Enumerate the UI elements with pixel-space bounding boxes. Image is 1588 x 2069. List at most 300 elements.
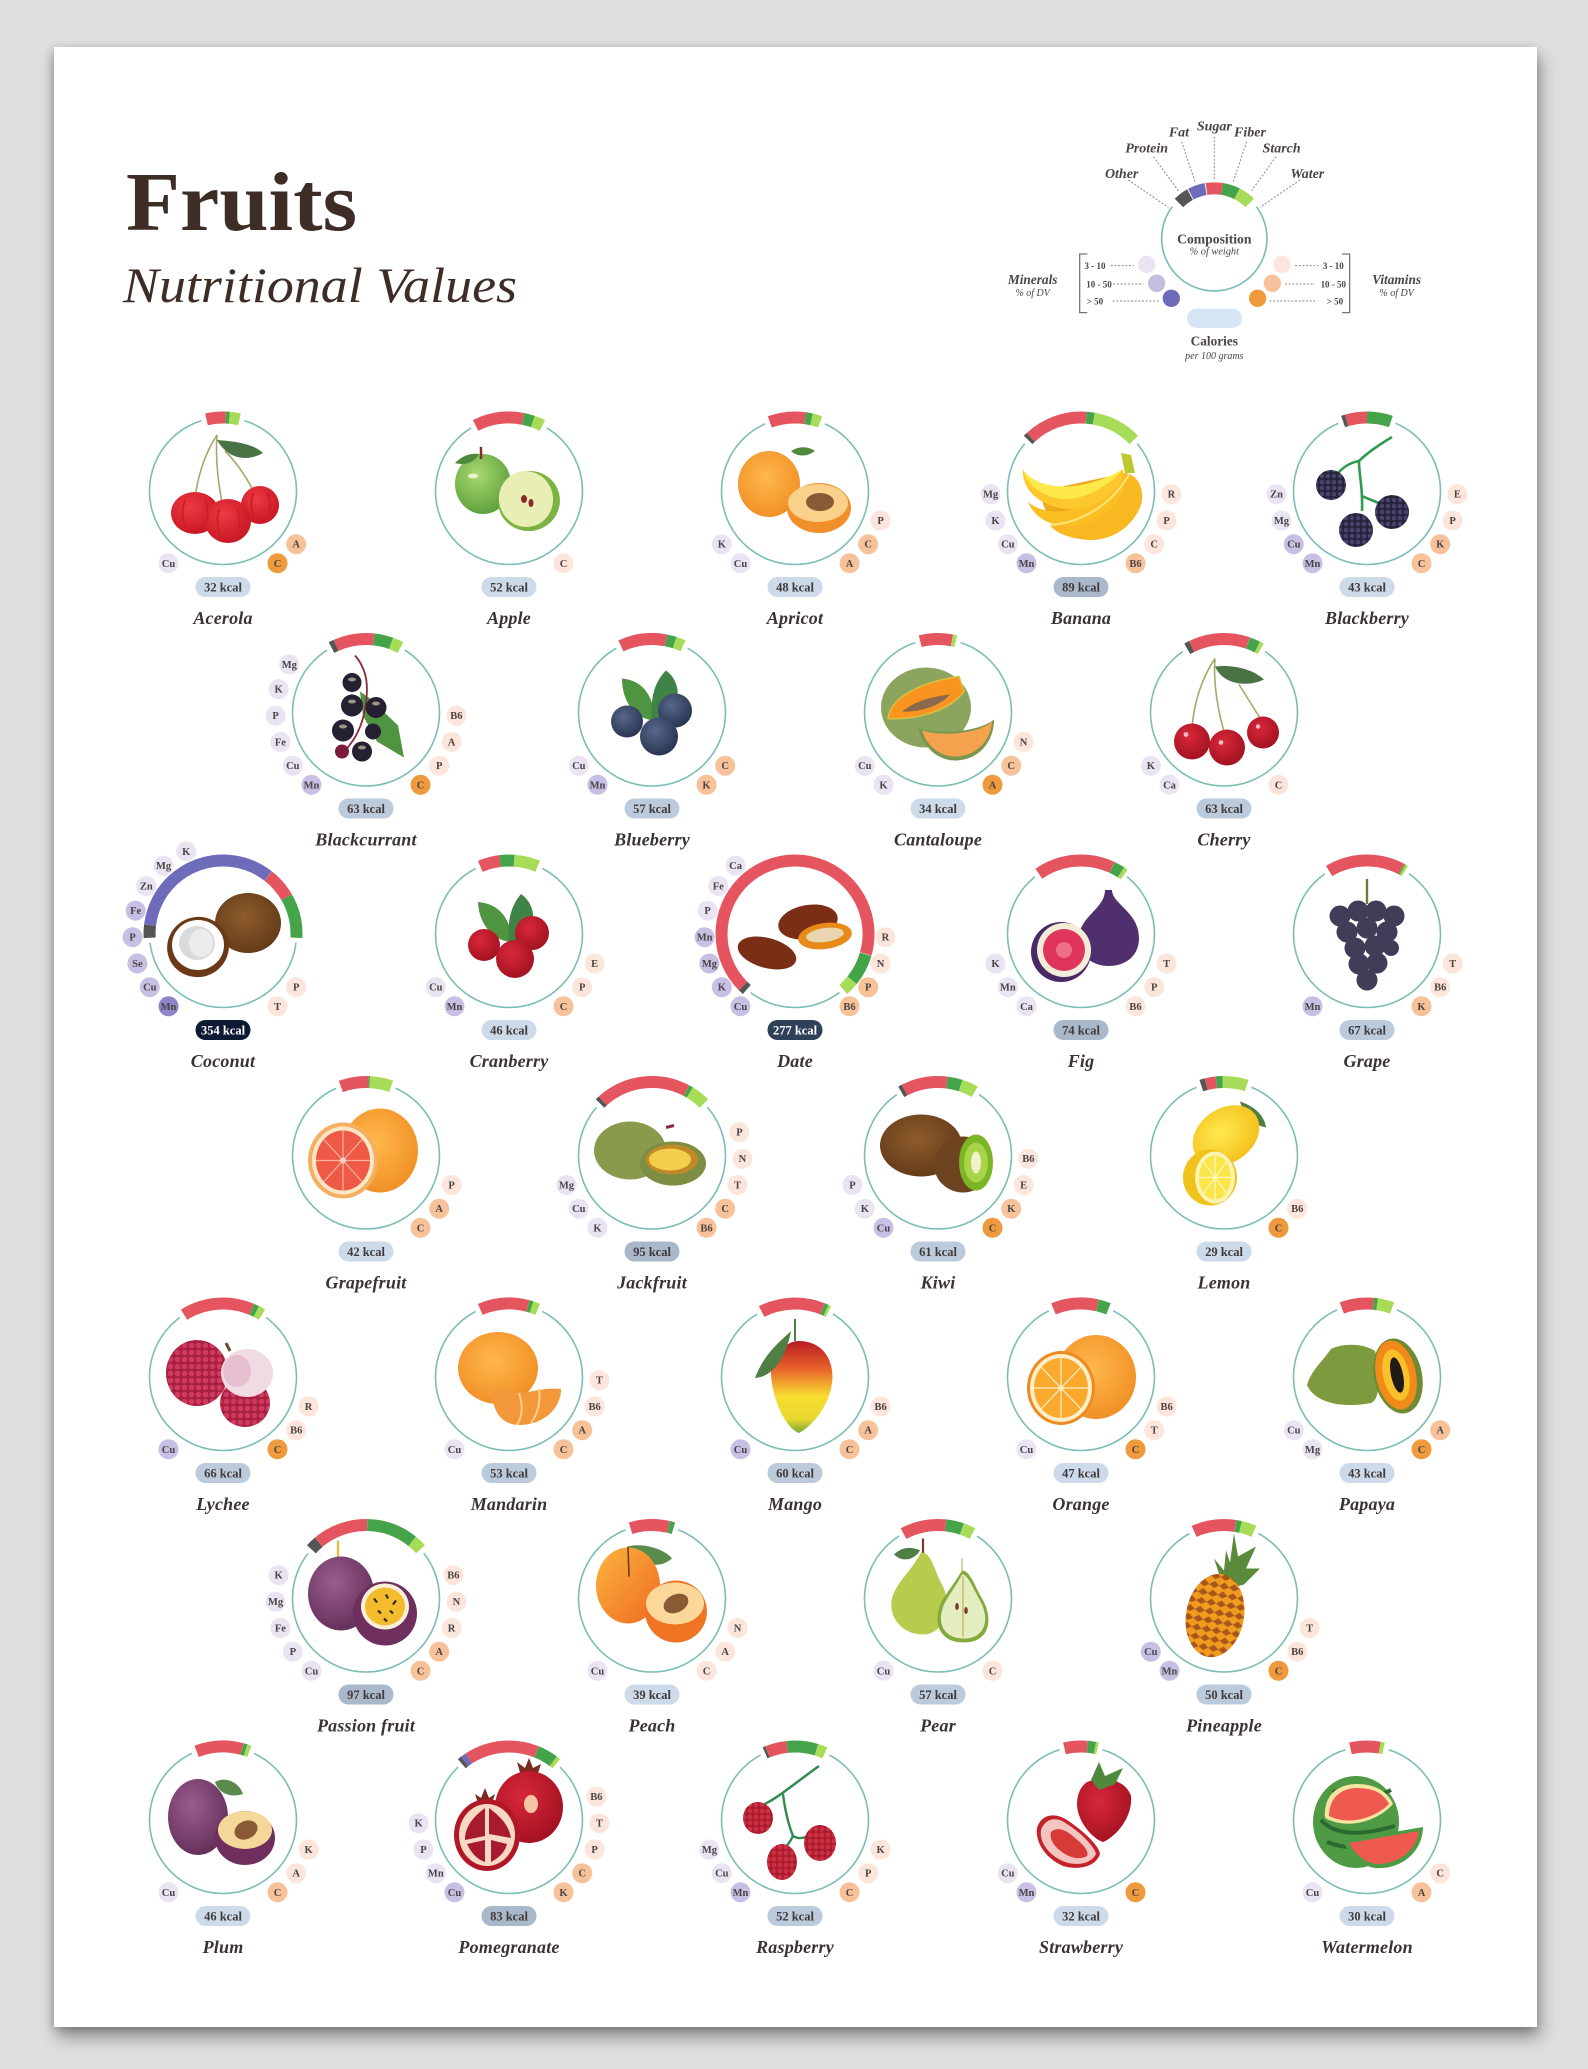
name: Watermelon [1321, 1937, 1413, 1957]
vitamins [268, 534, 306, 573]
vitamins [982, 1149, 1038, 1238]
calories pill [482, 1906, 536, 1926]
fruit: Fig [978, 831, 1184, 1071]
vitamins [554, 954, 605, 1016]
ring [578, 1082, 726, 1229]
minerals [1141, 1642, 1180, 1681]
minerals: Cu [734, 559, 747, 570]
minerals: Cu [1306, 1888, 1319, 1899]
calories pill: 66 kcal [204, 1466, 242, 1480]
ring [722, 418, 868, 564]
minerals [158, 1882, 178, 1902]
vitamins [1268, 1199, 1307, 1238]
minerals [158, 553, 178, 573]
icon: cranberry [468, 894, 549, 978]
calories pill [1340, 1020, 1394, 1040]
minerals: Ca [1020, 1002, 1034, 1013]
calories pill: 60 kcal [776, 1466, 814, 1480]
calories pill: 57 kcal [633, 802, 671, 816]
minerals: Mn [161, 1002, 177, 1013]
icon: strawberry [1037, 1762, 1131, 1868]
ring [1294, 1746, 1440, 1894]
calories pill [1196, 1242, 1252, 1262]
name: Blackberry [1324, 608, 1410, 628]
fruit: Kiwi [836, 1053, 1040, 1292]
calories pill: 52 kcal [776, 1910, 814, 1924]
vitamins [1412, 1420, 1450, 1459]
vitamins [1126, 954, 1177, 1016]
calories pill: 277 kcal [773, 1024, 818, 1038]
icon: cantaloupe [881, 668, 994, 760]
name: Acerola [192, 608, 253, 628]
name: Grape [1344, 1051, 1390, 1071]
vitamins: C [1418, 559, 1425, 570]
minerals: Cu [448, 1888, 461, 1899]
composition arc [557, 1504, 747, 1693]
vitamins: N [734, 1624, 742, 1634]
ring [436, 1304, 582, 1450]
vitamins: A [435, 1647, 443, 1658]
vitamins: T [596, 1819, 603, 1830]
composition arc [408, 390, 610, 592]
calories pill [624, 1242, 680, 1262]
minerals: Mg [282, 660, 298, 671]
vitamins: B6 [1022, 1154, 1035, 1165]
vitamins [1126, 1396, 1177, 1459]
composition arc [837, 1497, 1039, 1700]
ring [436, 418, 582, 564]
fruit: Acerola [131, 399, 315, 628]
minerals: Cu [572, 1204, 586, 1215]
minerals [569, 756, 608, 795]
minerals [1267, 484, 1322, 573]
vitamins: T [596, 1376, 603, 1387]
vitamins: A [578, 1426, 586, 1437]
minerals: K [879, 780, 888, 791]
name: Date [776, 1051, 813, 1071]
fruit: Blackcurrant [265, 611, 467, 850]
fruit: Orange [983, 1279, 1179, 1514]
name: Coconut [191, 1051, 256, 1071]
calories pill: 354 kcal [201, 1024, 246, 1038]
fruit: Apricot [698, 394, 892, 628]
calories pill: 29 kcal [1205, 1245, 1243, 1259]
calories pill: 43 kcal [1348, 1466, 1386, 1480]
legend vitamins bracket: 3 - 10 [1323, 261, 1344, 271]
composition arc [548, 1052, 756, 1259]
minerals [695, 856, 750, 1016]
calories pill: 50 kcal [1205, 1688, 1243, 1702]
vitamins: C [417, 780, 424, 791]
minerals: K [182, 847, 191, 858]
name: Blueberry [613, 830, 691, 850]
icon: passion fruit [308, 1540, 417, 1646]
minerals: K [415, 1819, 424, 1830]
composition arc [120, 831, 326, 1037]
minerals: Cu [305, 1666, 318, 1677]
calories pill [624, 798, 680, 818]
minerals: Mg [156, 861, 172, 872]
fruit: Strawberry [989, 1728, 1173, 1957]
vitamins [1268, 775, 1288, 795]
calories pill [1196, 1684, 1252, 1704]
minerals: Ca [729, 861, 743, 872]
icon: raspberry [743, 1766, 836, 1880]
minerals: Fe [275, 738, 286, 748]
fruit: Peach [557, 1504, 748, 1736]
vitamins: C [1275, 1223, 1282, 1234]
minerals: Fe [275, 1624, 286, 1634]
vitamins: K [702, 780, 711, 791]
minerals: Cu [162, 1445, 175, 1456]
composition arc [691, 830, 899, 1038]
calories pill: 52 kcal [490, 580, 528, 594]
icon: grapefruit [308, 1108, 418, 1198]
vitamins: B6 [1129, 1002, 1142, 1013]
icon: acerola [171, 435, 279, 543]
vitamins: P [591, 1845, 598, 1856]
composition arc [269, 1058, 463, 1253]
vitamins: C [846, 1888, 853, 1899]
name: Passion fruit [316, 1716, 416, 1736]
calories pill [1054, 1020, 1108, 1040]
minerals: Se [132, 959, 143, 970]
composition arc [410, 835, 608, 1033]
minerals [998, 1863, 1036, 1902]
icon: mandarin [458, 1332, 561, 1425]
minerals: Cu [143, 983, 157, 994]
vitamins: C [560, 559, 567, 570]
vitamins: P [865, 1869, 872, 1880]
calories pill: 46 kcal [490, 1024, 528, 1038]
vitamins: P [1151, 983, 1158, 994]
minerals [842, 1175, 894, 1238]
vitamins: C [417, 1223, 424, 1234]
vitamins: R [1168, 490, 1176, 501]
legend center text: Composition [1177, 231, 1252, 246]
calories pill: 63 kcal [1205, 802, 1243, 816]
vitamins [840, 510, 891, 573]
composition arc [1270, 1280, 1464, 1474]
calories pill: 43 kcal [1348, 580, 1386, 594]
vitamins: K [1436, 540, 1445, 551]
name: Strawberry [1039, 1937, 1124, 1957]
legend composition labels: Other [1105, 167, 1139, 182]
minerals: Mn [1019, 559, 1035, 570]
vitamins: B6 [700, 1223, 713, 1234]
vitamins [1412, 484, 1467, 573]
ring [292, 639, 440, 786]
composition arc [694, 1276, 896, 1478]
composition arc [552, 613, 752, 812]
vitamins: C [846, 1445, 853, 1456]
calories pill: 48 kcal [776, 580, 814, 594]
minerals: Cu [591, 1666, 604, 1677]
vitamins: E [1454, 490, 1461, 501]
ring [1150, 639, 1298, 786]
legend [1007, 120, 1421, 362]
legend composition labels: Starch [1263, 142, 1301, 157]
minerals: Mg [1274, 516, 1290, 527]
legend minerals label: Minerals [1007, 272, 1057, 287]
icon: pineapple [1179, 1534, 1260, 1662]
calories pill [196, 1463, 250, 1483]
vitamins: A [1436, 1426, 1444, 1437]
vitamins [554, 1370, 609, 1459]
minerals: P [704, 906, 711, 917]
name: Lychee [195, 1494, 250, 1514]
calories pill [338, 798, 394, 818]
minerals: Cu [1001, 1869, 1015, 1880]
legend minerals label [1007, 272, 1057, 299]
vitamins [696, 1618, 748, 1681]
vitamins: C [274, 1445, 281, 1456]
vitamins: A [846, 559, 854, 570]
ring [1150, 1525, 1298, 1672]
minerals: Fe [713, 882, 724, 892]
vitamins: P [448, 1180, 455, 1192]
vitamins [410, 1175, 462, 1238]
minerals: Cu [286, 761, 300, 772]
minerals [158, 1439, 178, 1459]
vitamins [268, 1396, 319, 1459]
vitamins: C [1275, 780, 1282, 791]
calories pill [768, 577, 822, 597]
legend leader lines [1128, 137, 1300, 207]
icon: pear [891, 1538, 988, 1642]
vitamins [268, 977, 306, 1016]
minerals: Mg [559, 1180, 575, 1192]
vitamins: A [721, 1647, 729, 1658]
minerals: Mg [702, 959, 718, 970]
name: Jackfruit [616, 1272, 688, 1292]
legend calories [1184, 309, 1244, 362]
composition arc [978, 831, 1184, 1037]
vitamins: C [1007, 761, 1015, 772]
fruit: Grape [1265, 832, 1469, 1071]
composition arc [405, 1716, 613, 1924]
name: Blackcurrant [314, 830, 418, 850]
vitamins: B6 [1291, 1204, 1303, 1215]
name: Raspberry [755, 1937, 835, 1957]
ring [150, 860, 296, 1008]
calories pill: 89 kcal [1062, 580, 1100, 594]
icon: watermelon [1313, 1776, 1423, 1868]
name: Pear [919, 1716, 957, 1736]
legend composition labels: Sugar [1197, 120, 1232, 135]
composition arc [410, 1278, 608, 1476]
vitamins: T [274, 1002, 281, 1013]
icon: date [734, 900, 854, 975]
ring [864, 1082, 1012, 1229]
ring [150, 418, 296, 564]
vitamins: B6 [843, 1002, 856, 1013]
minerals: Mg [268, 1597, 284, 1608]
vitamins: N [1020, 738, 1028, 748]
calories pill [1054, 577, 1108, 597]
minerals: Cu [162, 559, 175, 570]
vitamins [840, 1840, 891, 1902]
vitamins: B6 [290, 1426, 302, 1437]
legend minerals bracket: 3 - 10 [1085, 261, 1106, 271]
minerals: Mn [590, 780, 606, 791]
minerals: Mn [1305, 559, 1321, 570]
vitamins: E [1020, 1180, 1027, 1192]
vitamins: N [877, 959, 885, 970]
minerals: Cu [448, 1445, 461, 1456]
minerals: P [272, 711, 279, 722]
vitamins: A [448, 738, 456, 748]
vitamins: A [989, 780, 997, 791]
calories pill [910, 1684, 966, 1704]
vitamins: N [739, 1154, 747, 1165]
composition arc [989, 1728, 1173, 1912]
calories pill [338, 1684, 394, 1704]
icon: blackcurrant [332, 656, 404, 762]
calories pill: 57 kcal [919, 1688, 957, 1702]
vitamins: E [591, 959, 598, 970]
vitamins: T [1151, 1426, 1158, 1437]
calories pill [1054, 1906, 1108, 1926]
calories pill: 95 kcal [633, 1245, 671, 1259]
minerals: Mg [702, 1845, 718, 1856]
fruit: Raspberry [696, 1721, 894, 1957]
vitamins: C [1150, 540, 1158, 551]
ring [578, 1525, 726, 1672]
minerals: Mn [733, 1888, 749, 1899]
minerals [1302, 1882, 1322, 1902]
legend composition labels: Fat [1168, 125, 1190, 140]
ring [1008, 418, 1154, 564]
minerals: Cu [715, 1869, 729, 1880]
composition arc [1275, 1728, 1459, 1912]
subtitle: Nutritional Values [122, 257, 517, 313]
minerals: Cu [1001, 540, 1015, 551]
calories pill [768, 1906, 822, 1926]
name: Pomegranate [457, 1937, 560, 1957]
vitamins: K [1417, 1002, 1426, 1013]
vitamins: P [293, 983, 300, 994]
composition arc [977, 387, 1185, 595]
composition arc [1271, 395, 1463, 587]
icon: blueberry [611, 670, 692, 756]
minerals [1284, 1420, 1322, 1459]
vitamins: C [1275, 1666, 1282, 1677]
calories pill: 61 kcal [919, 1245, 957, 1259]
ring [1008, 860, 1154, 1008]
fruit: Watermelon [1275, 1728, 1459, 1957]
icon: jackfruit [594, 1122, 706, 1186]
legend composition labels [1105, 120, 1325, 182]
calories pill: 42 kcal [347, 1245, 385, 1259]
vitamins: B6 [1160, 1402, 1173, 1413]
minerals [981, 484, 1036, 573]
vitamins: T [734, 1180, 741, 1192]
legend calories: per 100 grams [1184, 351, 1244, 362]
ring [150, 1746, 296, 1894]
icon: pomegranate [454, 1758, 563, 1871]
vitamins [696, 1122, 752, 1238]
fruit: Jackfruit [548, 1052, 756, 1292]
ring [578, 639, 726, 786]
ring [722, 860, 868, 1008]
calories pill: 32 kcal [1062, 1910, 1100, 1924]
calories pill [910, 798, 966, 818]
calories pill [338, 1242, 394, 1262]
composition arc [1265, 832, 1469, 1036]
minerals: K [718, 983, 727, 994]
vitamins [268, 1840, 319, 1902]
name: Plum [202, 1937, 243, 1957]
calories pill: 74 kcal [1062, 1024, 1100, 1038]
legend composition arc [1144, 168, 1285, 309]
name: Cranberry [470, 1051, 549, 1071]
legend minerals bracket: 10 - 50 [1086, 279, 1112, 289]
fruit: Date [691, 830, 899, 1071]
minerals [1141, 756, 1180, 795]
ring [292, 1525, 440, 1672]
minerals: Cu [162, 1888, 175, 1899]
name: Pineapple [1185, 1716, 1262, 1736]
composition arc [1125, 1499, 1323, 1698]
icon: fig [1031, 890, 1139, 982]
calories pill: 63 kcal [347, 802, 385, 816]
legend composition labels: Water [1290, 167, 1325, 182]
fruit: Mango [694, 1276, 896, 1514]
calories pill [196, 577, 250, 597]
minerals [588, 1661, 608, 1681]
vitamins: K [559, 1888, 568, 1899]
vitamins: A [1418, 1888, 1426, 1899]
vitamins: C [864, 540, 872, 551]
fruit: Pineapple [1125, 1499, 1323, 1736]
vitamins: C [721, 761, 729, 772]
minerals: Ca [1163, 780, 1177, 791]
calories pill [768, 1020, 822, 1040]
vitamins [1268, 1618, 1320, 1681]
vitamins [1412, 954, 1463, 1016]
calories pill [482, 1020, 536, 1040]
vitamins: B6 [588, 1402, 601, 1413]
legend ring [1162, 186, 1267, 291]
composition arc [696, 1721, 894, 1919]
calories pill [1340, 1906, 1394, 1926]
fruit: Coconut [120, 831, 326, 1071]
vitamins: P [865, 983, 872, 994]
minerals: Cu [858, 761, 872, 772]
ring [292, 1082, 440, 1229]
vitamins: R [882, 933, 890, 944]
calories pill [196, 1020, 250, 1040]
fruit: Lychee [120, 1274, 326, 1514]
legend minerals label: % of DV [1015, 288, 1052, 299]
vitamins: P [736, 1128, 743, 1139]
minerals: Cu [429, 983, 443, 994]
vitamins: A [435, 1204, 443, 1215]
calories pill [1340, 1463, 1394, 1483]
minerals: Mg [983, 490, 999, 501]
calories pill: 39 kcal [633, 1688, 671, 1702]
minerals [266, 654, 322, 795]
ring [150, 1304, 296, 1450]
calories pill [1054, 1463, 1108, 1483]
calories pill [196, 1906, 250, 1926]
composition arc [698, 394, 892, 588]
vitamins: R [305, 1402, 313, 1413]
ring [1294, 1304, 1440, 1450]
minerals [699, 1840, 750, 1902]
vitamins: R [448, 1624, 456, 1634]
